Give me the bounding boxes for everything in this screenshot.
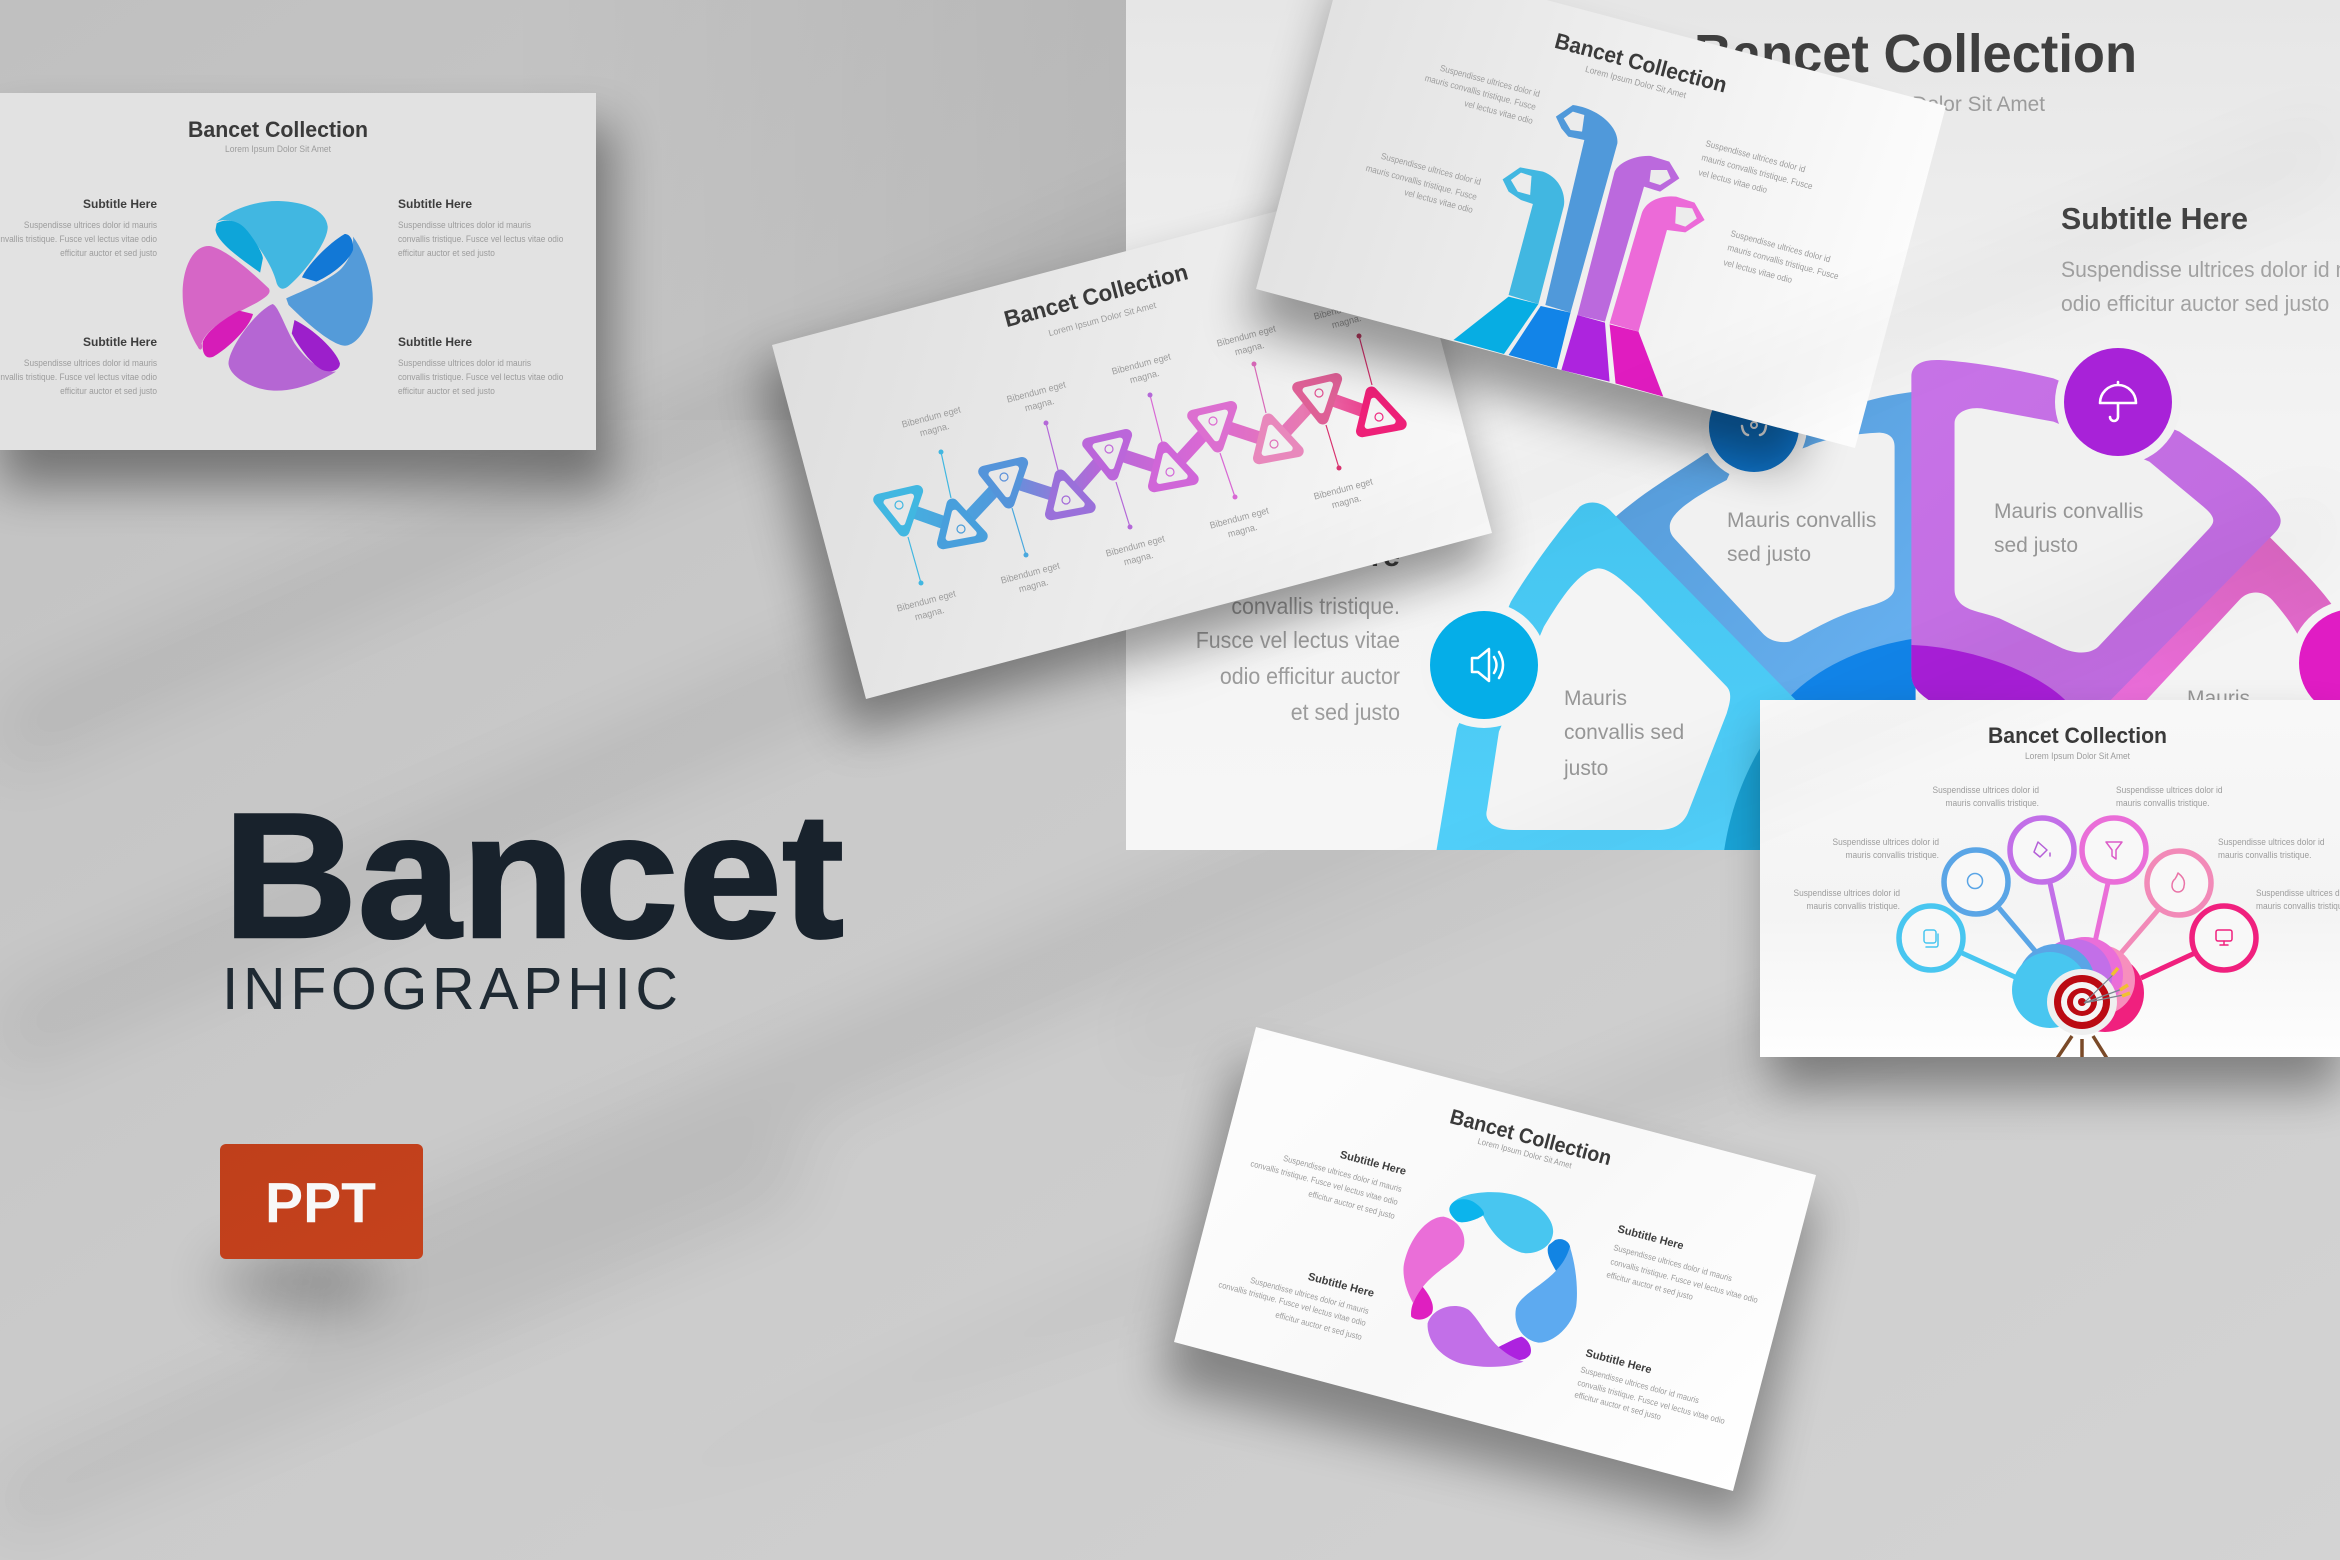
text block: lower left: Subtitle Here [1307,1271,1375,1300]
text blocks left: mauris convallis tristique. [1946,798,2039,808]
text blocks right: Suspendisse ultrices dolor id [2218,837,2325,847]
slide title: Bancet Collection [1001,258,1191,332]
text block: upper right: Subtitle Here [1616,1223,1685,1252]
badge: umbrella [2055,339,2181,465]
blue segment label: sed justo [1727,543,1811,566]
timeline labels: Bibendum eget [896,588,957,614]
main subtitle: INFOGRAPHIC [222,956,678,1022]
purple segment label: sed justo [1994,534,2078,557]
background [920,1001,2340,1560]
dark cyan sector [1724,700,1856,853]
purple segment inner [1955,408,2213,652]
panel: timeline slide [772,179,1492,699]
text blocks right [2116,785,2340,911]
slide subtitle: Lorem Ipsum Dolor Sit Amet [1047,300,1158,338]
text block: upper left: convallis tristique. Fusce vel lectus vitae odio [1249,1159,1399,1207]
pink column [1610,196,1705,332]
text block: lower right: Suspendisse ultrices dolor id [1729,228,1832,264]
text block: upper right: convallis tristique. Fusce vel lectus vitae odio [1609,1257,1759,1305]
text blocks left: Suspendisse ultrices dolor id [1793,888,1900,898]
text block: upper left: Suspendisse ultrices dolor id mauris [1282,1154,1403,1194]
big slide left subtitle: Subtitle Here [1209,538,1400,573]
fan stems [1962,883,2195,978]
timeline labels: Bibendum eget [1111,351,1172,377]
text block: upper right: efficitur auctor et sed justo [1605,1270,1694,1302]
slide shadow: fan slide [1770,730,2340,1090]
text block: upper left: vel lectus vitae odio [1463,98,1534,126]
text block: lower left: Suspendisse ultrices dolor id mauris [1249,1276,1370,1316]
big slide left body text: Fusce vel lectus vitae [1196,627,1400,653]
timeline labels: Bibendum eget [1313,296,1374,322]
text block: lower left [1217,1271,1375,1342]
slide subtitle: Lorem Ipsum Dolor Sit Amet [1584,64,1688,100]
panel: fan slide [1760,700,2340,1060]
cyan segment [1436,503,1844,860]
timeline labels: magna. [1129,368,1160,385]
slide shadow: columns slide [1245,0,1880,470]
text block: lower right: mauris convallis tristique. Fusce [1726,242,1840,281]
text block: top right: convallis tristique. Fusce vel lectus vitae odio [398,234,564,244]
text block: lower right: Suspendisse ultrices dolor id mauris [1579,1365,1700,1405]
cyan segment label: Mauris [1564,687,1627,710]
text block: upper left: efficitur auctor et sed justo [1307,1189,1396,1221]
panel: large cropped slide [1126,0,2340,860]
big slide subtitle: Lorem Ipsum Dolor Sit Amet [1785,93,2045,116]
text block: lower right: efficitur auctor et sed justo [1573,1390,1662,1422]
timeline labels [896,296,1378,626]
timeline triangles [879,379,1401,543]
target stand [2056,1036,2108,1060]
slide shadow: top-left slide [0,125,612,487]
timeline labels: magna. [1024,396,1055,413]
timeline labels: magna. [1227,522,1258,539]
purple segment label: Mauris convallis [1994,500,2143,523]
cyan segment label: convallis sed [1564,721,1684,744]
timeline labels: magna. [1123,550,1154,567]
big slide right subtitle: Subtitle Here [2061,201,2248,236]
text block: bottom left: Subtitle Here [83,335,157,349]
big slide left body text: convallis tristique. [1231,593,1400,619]
text block: upper left [1249,1149,1407,1221]
text block: upper right: mauris convallis tristique. Fusce [1700,152,1814,191]
blue segment inner [1670,433,1895,642]
purple column [1577,156,1679,322]
text block: upper right [1605,1223,1759,1305]
text blocks right: mauris convallis tristique. [2218,850,2311,860]
timeline labels: magna. [1234,340,1265,357]
big slide left body text [1196,593,1401,725]
timeline labels: magna. [914,605,945,622]
big slide right body text: odio efficitur auctor sed justo [2061,291,2329,316]
timeline connector [900,395,1378,528]
timeline labels: Bibendum eget [1006,379,1067,405]
big slide left body text: odio efficitur auctor [1220,663,1401,689]
slide subtitle: Lorem Ipsum Dolor Sit Amet [2025,751,2130,761]
timeline labels: Bibendum eget [1216,323,1277,349]
big ring diagram [1436,360,2340,860]
text block: lower left: Suspendisse ultrices dolor id [1380,150,1482,187]
text block: bottom right: convallis tristique. Fusce vel lectus vitae odio [398,372,564,382]
petal diagram [183,201,373,391]
drop ring diagram [1403,1192,1577,1367]
text blocks left [1793,785,2039,911]
text block: top left: Subtitle Here [83,197,157,211]
format badge: PPT: PPT [265,1171,376,1235]
dark purple sector [1911,645,2068,703]
slide shadow: ring slide [1160,1060,1816,1525]
text block: upper right: Suspendisse ultrices dolor id mauris [1612,1243,1733,1283]
timeline pin dots [918,334,1362,586]
big slide left body text: et sed justo [1291,699,1400,725]
text block: lower left: mauris convallis tristique. Fusce [1365,163,1478,202]
blue column [1545,105,1617,313]
slide title: Bancet Collection [1447,1105,1614,1170]
timeline labels: Bibendum eget [901,404,962,430]
text block: lower right [1722,228,1840,285]
slide title: Bancet Collection [1552,28,1730,98]
text blocks left: Suspendisse ultrices dolor id [1932,785,2039,795]
cyan column [1503,167,1564,304]
column head openings [1511,112,1697,227]
text block: upper right [1697,138,1814,195]
text block: bottom right [398,335,564,396]
background light bands [20,220,1759,1500]
panel: ring slide [1174,1027,1816,1491]
text block: bottom right: Subtitle Here [398,335,472,349]
text blocks left: Suspendisse ultrices dolor id [1832,837,1939,847]
fan icons [1924,842,2232,947]
column chart [1453,105,1705,397]
text block: bottom right: efficitur auctor et sed justo [398,386,495,396]
text block: bottom left: Suspendisse ultrices dolor id mauris [24,358,158,368]
text block: upper right: Suspendisse ultrices dolor id [1704,138,1807,174]
column bases [1453,297,1663,397]
text block: top right: Subtitle Here [398,197,472,211]
panel: columns slide [1256,0,1946,448]
timeline labels: Bibendum eget [1209,505,1270,531]
window light overlay [1126,100,2340,1080]
timeline labels: magna. [1331,493,1362,510]
target icon [2047,968,2130,1035]
text block: upper left: Suspendisse ultrices dolor id [1439,62,1541,99]
pink segment inner [2143,592,2317,703]
text block: lower right: Subtitle Here [1584,1347,1653,1376]
big slide title: Bancet Collection [1694,24,2137,84]
blue segment [1616,392,1916,700]
text block: top right: efficitur auctor et sed justo [398,248,495,258]
format badge: PPT [220,1144,423,1259]
text block: upper left: mauris convallis tristique. Fusce [1424,73,1537,112]
text blocks right: mauris convallis tristique. [2116,798,2209,808]
slide title: Bancet Collection [188,117,368,142]
badge: magenta [2290,600,2340,726]
timeline icons [895,389,1383,533]
text block: lower left [1365,150,1482,215]
slide subtitle: Lorem Ipsum Dolor Sit Amet [225,144,331,154]
fan base discs [2012,937,2144,1032]
big slide right body text [2061,257,2340,316]
text block: lower right [1573,1347,1726,1426]
slide title: Bancet Collection [1988,723,2167,748]
text block: lower left: convallis tristique. Fusce vel lectus vitae odio [1217,1280,1367,1328]
badge: speaker [1421,602,1547,728]
timeline pins [908,336,1372,583]
text block: top left: Suspendisse ultrices dolor id mauris [24,220,158,230]
text block: lower left: efficitur auctor et sed justo [1274,1310,1363,1342]
text block: bottom left [0,335,158,396]
text block: upper left [1424,62,1541,126]
text block: top right: Suspendisse ultrices dolor id mauris [398,220,532,230]
text block: upper right: vel lectus vitae odio [1697,167,1769,195]
text block: bottom left: efficitur auctor et sed justo [60,386,157,396]
text block: lower right: vel lectus vitae odio [1722,257,1794,285]
panel: top-left slide [0,93,596,450]
text block: lower left: vel lectus vitae odio [1403,187,1474,215]
timeline labels: magna. [1018,577,1049,594]
background top shade [884,0,1126,314]
purple segment [1911,360,2281,703]
timeline labels: magna. [1331,313,1362,330]
blue segment label: Mauris convallis [1727,509,1876,532]
dark blue sector [1790,638,1916,703]
text blocks left: mauris convallis tristique. [1846,850,1939,860]
cyan segment label: justo [1563,757,1608,780]
text blocks right: Suspendisse ultrices dolor id [2116,785,2223,795]
pink segment label: Mauris [2187,687,2250,710]
cyan segment inner [1486,568,1730,830]
text block: top right [398,197,564,258]
text block: top left [0,197,158,258]
timeline labels: magna. [919,421,950,438]
text block: top left: efficitur auctor et sed justo [60,248,157,258]
main title: Bancet [223,776,844,975]
slide shadow: timeline slide [760,210,1492,735]
timeline labels: Bibendum eget [1105,533,1166,559]
timeline labels: Bibendum eget [1313,476,1374,502]
text block: upper left: Subtitle Here [1339,1149,1407,1178]
pink segment [2101,537,2340,703]
text block: lower right: convallis tristique. Fusce vel lectus vitae odio [1576,1378,1726,1426]
text block: bottom right: Suspendisse ultrices dolor id mauris [398,358,532,368]
slide subtitle: Lorem Ipsum Dolor Sit Amet [1477,1136,1573,1171]
badge shadow [215,1256,385,1308]
timeline labels: Bibendum eget [1000,560,1061,586]
fan circles [1899,818,2256,970]
text blocks left: mauris convallis tristique. [1807,901,1900,911]
badge: focus [1701,374,1807,480]
